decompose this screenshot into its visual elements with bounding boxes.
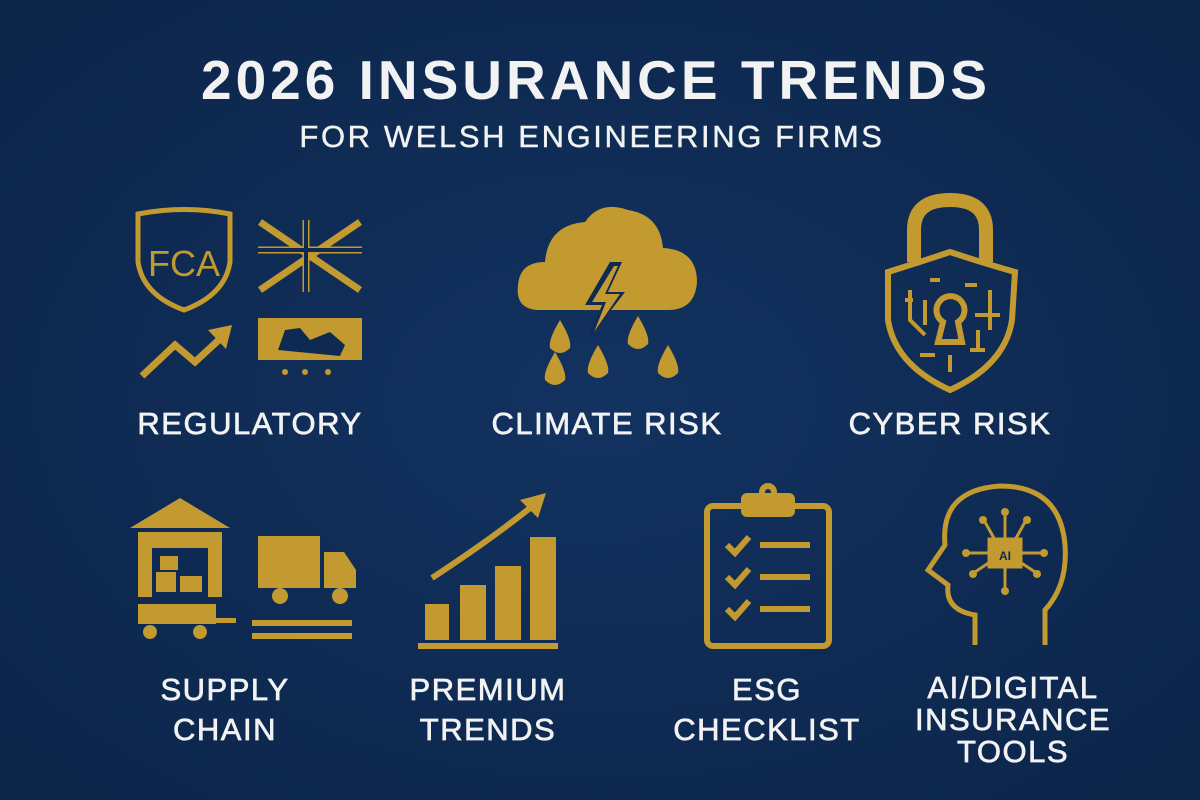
title: 2026 INSURANCE TRENDS — [201, 49, 991, 111]
icon: ESG clipboard — [707, 486, 829, 646]
text: AI — [999, 549, 1011, 563]
icon: premium bar chart — [418, 493, 558, 649]
label: ESG checklist: ESG — [732, 672, 802, 707]
label: AI digital tools: TOOLS — [957, 734, 1069, 769]
label: AI digital tools: AI/DIGITAL — [927, 670, 1099, 705]
icon: cyber lock — [888, 200, 1015, 390]
icon: regulatory — [138, 210, 362, 376]
icon: AI head — [928, 486, 1065, 645]
icon: supply chain — [130, 498, 356, 639]
label: AI digital tools — [915, 670, 1111, 769]
label: premium trends: TRENDS — [420, 712, 556, 747]
icon: regulatory: FCA — [148, 243, 220, 284]
label: climate risk: CLIMATE RISK — [491, 406, 723, 441]
label: ESG checklist — [673, 672, 861, 747]
icon: climate — [518, 207, 697, 385]
label: ESG checklist: CHECKLIST — [673, 712, 861, 747]
label: supply chain — [160, 672, 290, 747]
label: supply chain: CHAIN — [173, 712, 277, 747]
label: premium trends — [410, 672, 566, 747]
subtitle: FOR WELSH ENGINEERING FIRMS — [299, 119, 885, 154]
label: regulatory: REGULATORY — [137, 406, 363, 441]
label: premium trends: PREMIUM — [410, 672, 566, 707]
label: supply chain: SUPPLY — [160, 672, 290, 707]
label: AI digital tools: INSURANCE — [915, 702, 1111, 737]
label: cyber risk: CYBER RISK — [849, 406, 1051, 441]
